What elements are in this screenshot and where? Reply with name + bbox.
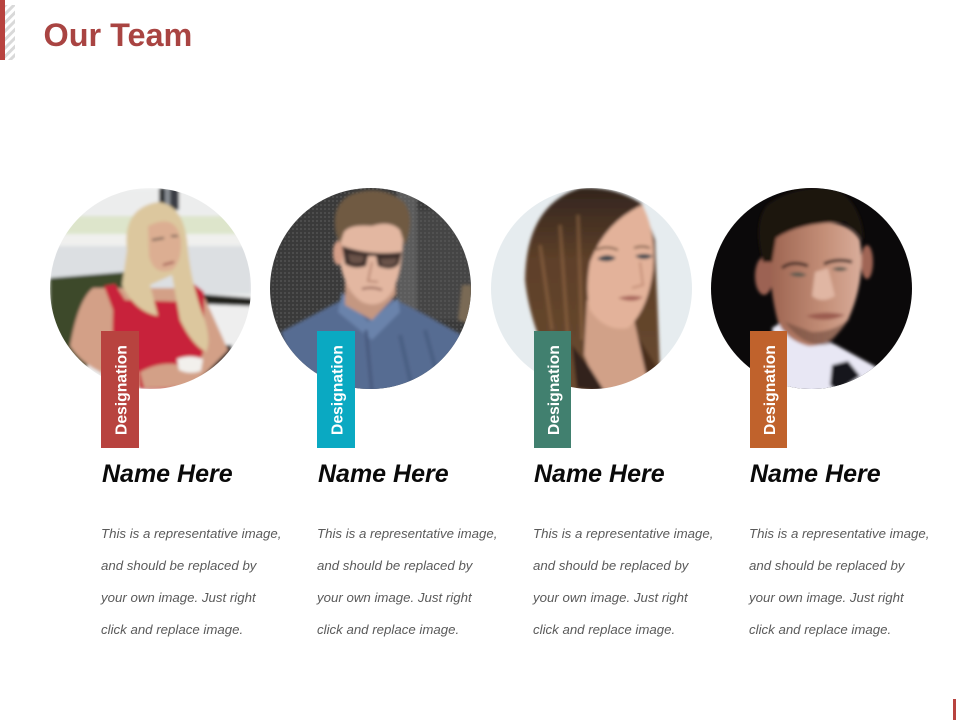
- panel: team member 3: [490, 188, 713, 637]
- photo: woman with long brown hair: [490, 188, 693, 395]
- description 4: your own image. Just right: [748, 590, 905, 605]
- label: designation 1: [101, 331, 139, 448]
- description 1: your own image. Just right: [100, 590, 257, 605]
- photo: man with glasses: [270, 188, 477, 395]
- description 3: [532, 526, 713, 637]
- description 1: click and replace image.: [101, 622, 243, 637]
- panel: team member 4: [710, 188, 929, 637]
- description 4: [748, 526, 929, 637]
- corner accent: title bar: [0, 0, 15, 60]
- name 1: Name Here: [102, 460, 233, 488]
- photo: man in white shirt and tie: [710, 188, 913, 395]
- description 2: and should be replaced by: [317, 558, 474, 573]
- description 2: your own image. Just right: [316, 590, 473, 605]
- photo: woman in red dress: [50, 188, 252, 390]
- description 2: click and replace image.: [317, 622, 459, 637]
- label: designation 4: [750, 331, 787, 448]
- description 4: and should be replaced by: [749, 558, 906, 573]
- label: designation 3: Designation: [546, 345, 563, 435]
- description 3: This is a representative image,: [533, 526, 713, 541]
- name 2: Name Here: [318, 460, 449, 488]
- description 2: This is a representative image,: [317, 526, 497, 541]
- name 3: Name Here: [534, 460, 665, 488]
- label: designation 2: [317, 331, 355, 448]
- panel: team member 2: [270, 188, 497, 637]
- corner accent: bottom right: [953, 699, 956, 720]
- label: designation 4: Designation: [762, 345, 779, 435]
- description 1: This is a representative image,: [101, 526, 281, 541]
- label: designation 2: Designation: [330, 345, 346, 435]
- title: Our Team: [44, 17, 192, 53]
- description 2: [316, 526, 497, 637]
- description 1: [100, 526, 281, 637]
- description 1: and should be replaced by: [101, 558, 258, 573]
- description 3: click and replace image.: [533, 622, 675, 637]
- label: designation 3: [534, 331, 571, 448]
- description 3: your own image. Just right: [532, 590, 689, 605]
- label: designation 1: Designation: [114, 345, 130, 435]
- name 4: Name Here: [750, 460, 881, 488]
- panel: team member 1: [50, 188, 281, 637]
- description 4: This is a representative image,: [749, 526, 929, 541]
- description 4: click and replace image.: [749, 622, 891, 637]
- description 3: and should be replaced by: [533, 558, 690, 573]
